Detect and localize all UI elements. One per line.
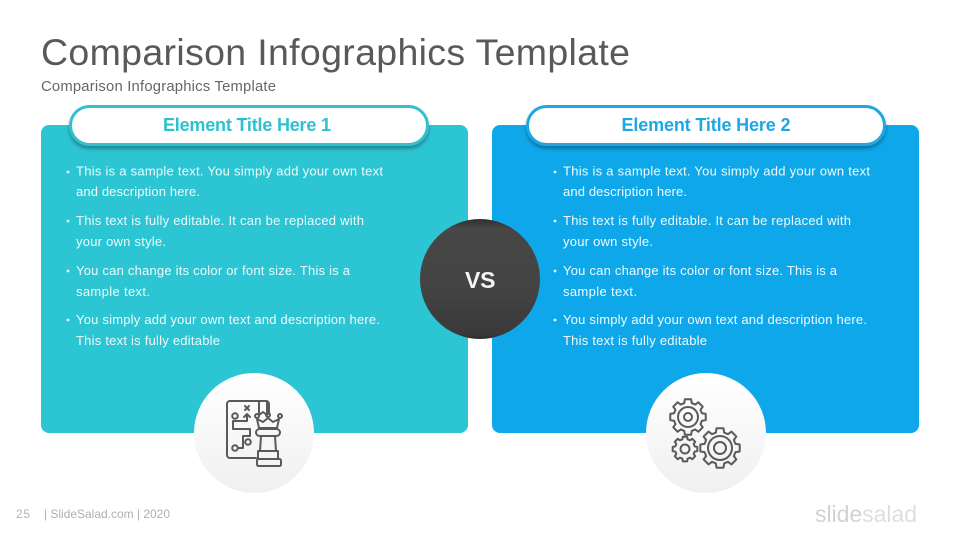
bullet list: and description here. xyxy=(563,184,687,199)
bullet list: and description here. xyxy=(76,184,200,199)
panel background xyxy=(41,125,468,433)
heading pill: Element Title Here 1 xyxy=(163,115,331,135)
heading pill xyxy=(528,106,884,144)
VS badge xyxy=(420,219,540,339)
bullet list: You can change its color or font size. This is a xyxy=(76,263,351,278)
bullet list xyxy=(554,164,870,348)
bullet list: This text is fully editable xyxy=(76,333,220,348)
bullet list: your own style. xyxy=(563,234,653,249)
VS badge: VS xyxy=(465,267,496,293)
bullet list: sample text. xyxy=(76,284,150,299)
bullet list: This text is fully editable xyxy=(563,333,707,348)
panel: element 1 xyxy=(41,106,468,433)
bullet list: You simply add your own text and description here. xyxy=(563,312,867,327)
bullet list: your own style. xyxy=(76,234,166,249)
bullet list: sample text. xyxy=(563,284,637,299)
icon: strategy map and chess queen xyxy=(194,373,314,493)
heading pill: Element Title Here 2 xyxy=(622,115,790,135)
bullet list: This text is fully editable. It can be replaced with xyxy=(563,213,851,228)
footer source: | SlideSalad.com | 2020 xyxy=(44,507,170,521)
footer page number: 25 xyxy=(16,507,30,521)
heading pill xyxy=(70,106,428,144)
bullet list: You simply add your own text and description here. xyxy=(76,312,380,327)
panel background xyxy=(492,125,919,433)
panel: element 2 xyxy=(492,106,919,433)
bullet list xyxy=(67,164,383,348)
bullet list: This is a sample text. You simply add your own text xyxy=(76,164,383,178)
icon: three gears xyxy=(646,373,766,493)
bullet list: This is a sample text. You simply add your own text xyxy=(563,164,870,178)
bullet list: This text is fully editable. It can be replaced with xyxy=(76,213,364,228)
title: Comparison Infographics Template xyxy=(41,31,630,73)
subtitle: Comparison Infographics Template xyxy=(41,79,276,95)
bullet list: You can change its color or font size. This is a xyxy=(563,263,838,278)
logo: slidesalad xyxy=(815,501,917,527)
